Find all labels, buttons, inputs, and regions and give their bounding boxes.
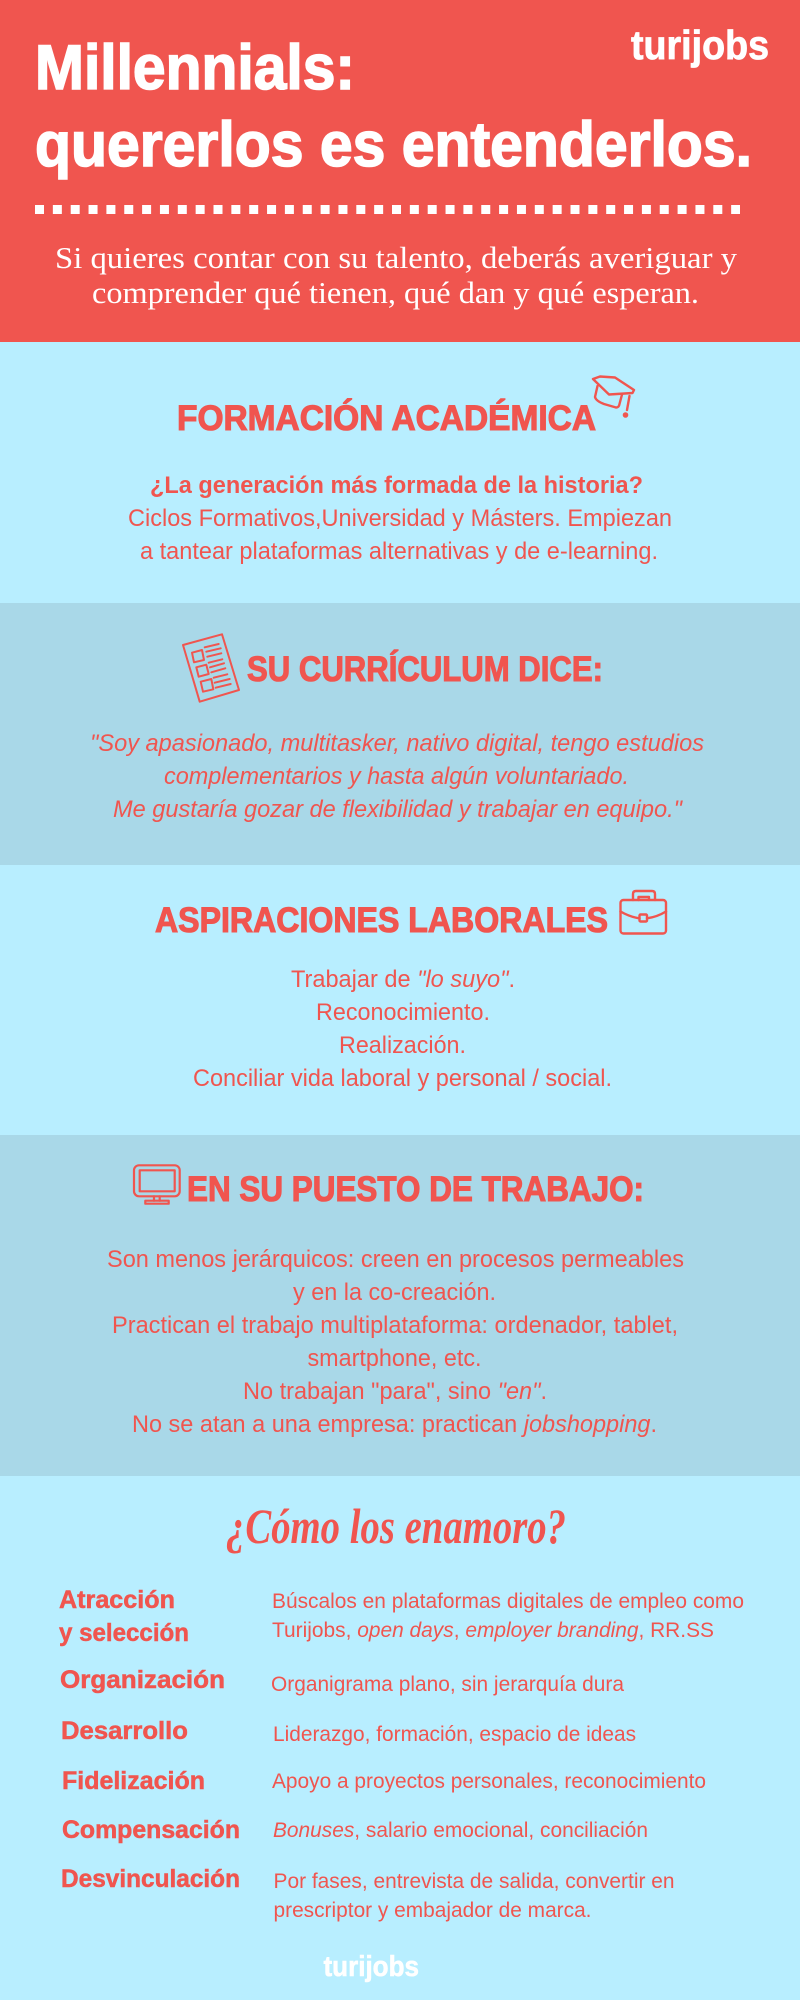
text: puesto de trabajo: No se atan a una empresa: practican jobshopping.: [132, 1411, 657, 1438]
row: desvinculación: Por fases, entrevista de salida, convertir en: [274, 1870, 674, 1893]
subtitle: Si quieres contar con su talento, deberás averiguar y: [55, 240, 738, 275]
text: aspiraciones: Realización.: [339, 1032, 466, 1059]
row: compensación: [62, 1816, 648, 1844]
text: aspiraciones: Trabajar de "lo suyo".: [291, 966, 515, 993]
text: formación académica: Ciclos Formativos,Universidad y Másters. Empiezan: [128, 505, 672, 532]
row: fidelización: Fidelización: [62, 1767, 205, 1795]
heading: cómo los enamoro: ¿Cómo los enamoro?: [226, 1498, 566, 1554]
quote: complementarios y hasta algún voluntariado.: [164, 763, 629, 790]
text: puesto de trabajo: No trabajan "para", sino "en".: [243, 1378, 547, 1405]
icon: resume document: [183, 634, 239, 702]
title: Millennials:: [35, 33, 355, 103]
heading: aspiraciones laborales: ASPIRACIONES LABORALES: [155, 901, 608, 940]
row: organización: Organización: [60, 1666, 225, 1694]
row: desarrollo: [61, 1717, 636, 1746]
panel: header: [0, 0, 800, 342]
logo: turijobs bottom: turijobs: [324, 1951, 419, 1983]
row: atracción y selección: Turijobs, open days, employer branding, RR.SS: [272, 1619, 714, 1642]
panel: cómo los enamoro: [0, 1476, 800, 2000]
heading: en su puesto de trabajo: EN SU PUESTO DE TRABAJO:: [187, 1170, 644, 1209]
row: fidelización: Apoyo a proyectos personales, reconocimiento: [272, 1770, 706, 1793]
quote: Me gustaría gozar de flexibilidad y trabajar en equipo.": [113, 796, 683, 823]
row: atracción y selección: Atracción: [59, 1586, 175, 1614]
icon: graduation cap: [593, 376, 634, 417]
icon: briefcase: [620, 891, 666, 934]
row: desvinculación: prescriptor y embajador de marca.: [274, 1899, 592, 1922]
row: atracción y selección: [59, 1586, 744, 1647]
icon: monitor: [134, 1165, 180, 1204]
heading: su currículum dice: SU CURRÍCULUM DICE:: [247, 649, 603, 689]
row: fidelización: [62, 1767, 706, 1795]
title: quererlos es entenderlos.: [35, 110, 752, 180]
row: organización: [60, 1666, 624, 1696]
text: aspiraciones: [193, 966, 612, 1092]
quote: "Soy apasionado, multitasker, nativo digital, tengo estudios: [90, 730, 704, 757]
text: puesto de trabajo: Son menos jerárquicos: creen en procesos permeables: [107, 1246, 684, 1273]
text: formación académica: ¿La generación más formada de la historia?: [150, 472, 643, 499]
text: aspiraciones: Conciliar vida laboral y personal / social.: [193, 1065, 612, 1092]
subtitle: comprender qué tienen, qué dan y qué esperan.: [92, 275, 699, 310]
row: desarrollo: Desarrollo: [61, 1717, 188, 1745]
quote: [90, 730, 704, 823]
logo: turijobs top: turijobs: [631, 22, 769, 68]
text: puesto de trabajo: Practican el trabajo multiplataforma: ordenador, tablet,: [112, 1312, 678, 1339]
text: puesto de trabajo: y en la co-creación.: [293, 1279, 496, 1306]
row: atracción y selección: y selección: [59, 1619, 189, 1647]
row: desarrollo: Liderazgo, formación, espacio de ideas: [273, 1723, 636, 1746]
row: atracción y selección: Búscalos en plataformas digitales de empleo como: [272, 1590, 744, 1613]
subtitle: [55, 240, 738, 310]
panel: aspiraciones laborales: [0, 865, 800, 1135]
row: organización: Organigrama plano, sin jerarquía dura: [271, 1673, 624, 1696]
text: puesto de trabajo: [107, 1246, 684, 1438]
row: compensación: Bonuses, salario emocional, conciliación: [273, 1819, 648, 1842]
text: formación académica: [128, 472, 672, 565]
text: formación académica: a tantear plataformas alternativas y de e-learning.: [140, 538, 658, 565]
row: compensación: Compensación: [62, 1816, 240, 1844]
panel: su currículum dice: [0, 603, 800, 865]
row: desvinculación: [61, 1865, 674, 1922]
panel: formación académica: [0, 342, 800, 603]
title: [35, 33, 752, 180]
heading: formación académica: FORMACIÓN ACADÉMICA: [177, 398, 596, 438]
row: desvinculación: Desvinculación: [61, 1865, 240, 1893]
text: puesto de trabajo: smartphone, etc.: [308, 1345, 482, 1372]
panel: en su puesto de trabajo: [0, 1135, 800, 1476]
text: aspiraciones: Reconocimiento.: [316, 999, 490, 1026]
